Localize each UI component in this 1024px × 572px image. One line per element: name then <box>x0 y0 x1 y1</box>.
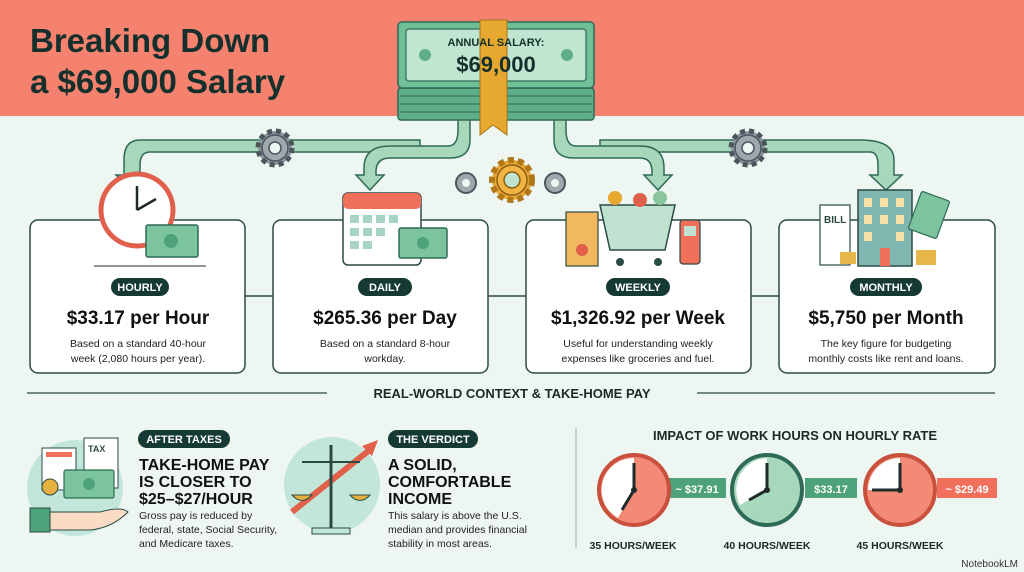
clock: 45 hours: 45 HOURS/WEEK <box>857 540 944 552</box>
clock: 40 hours: 40 HOURS/WEEK <box>724 540 811 552</box>
icon: building and bill: BILL <box>824 215 846 226</box>
card: daily: workday. <box>363 353 406 365</box>
panel: after taxes: AFTER TAXES <box>146 434 222 446</box>
card: monthly <box>779 190 995 373</box>
panel: impact of work hours <box>590 428 997 552</box>
clock: 35 hours: ~ $37.91 <box>675 484 719 496</box>
watermark: NotebookLM <box>961 559 1018 570</box>
panel: after taxes <box>27 430 277 550</box>
section heading: REAL-WORLD CONTEXT & TAKE-HOME PAY <box>373 386 651 401</box>
icon: calendar <box>343 193 447 265</box>
badge: after taxes <box>138 430 230 448</box>
panel: the verdict: median and provides financial <box>388 524 527 536</box>
gears <box>258 131 765 200</box>
panel: after taxes: IS CLOSER TO <box>139 474 252 491</box>
clock: 45 hours: ~ $29.49 <box>945 484 989 496</box>
title: Breaking Down <box>30 22 270 59</box>
panel: the verdict <box>284 430 527 550</box>
card: weekly: WEEKLY <box>615 282 662 294</box>
card: weekly <box>526 191 751 373</box>
card: hourly: HOURLY <box>117 282 163 294</box>
panel: impact of work hours: IMPACT OF WORK HOURS ON HOURLY RATE <box>653 428 937 443</box>
badge: monthly <box>850 278 922 296</box>
clock: 40 hours: $33.17 <box>814 484 848 496</box>
card: hourly: Based on a standard 40-hour <box>70 338 207 350</box>
panel: after taxes: $25–$27/HOUR <box>139 491 253 508</box>
panel: after taxes: and Medicare taxes. <box>139 538 234 550</box>
money flow arrows <box>116 118 902 190</box>
panel: the verdict: stability in most areas. <box>388 538 492 550</box>
panel: the verdict: A SOLID, <box>388 457 457 474</box>
clock: 35 hours <box>590 455 726 552</box>
icon: scale with arrow <box>284 437 380 534</box>
card: daily: Based on a standard 8-hour <box>320 338 451 350</box>
card: monthly: MONTHLY <box>859 282 913 294</box>
panel: the verdict: COMFORTABLE <box>388 474 512 491</box>
clock: 40 hours <box>724 455 857 552</box>
card: monthly: The key figure for budgeting <box>821 338 952 350</box>
card: daily: DAILY <box>369 282 402 294</box>
card: hourly: $33.17 per Hour <box>67 308 210 329</box>
header band <box>0 0 1024 116</box>
card: weekly: expenses like groceries and fuel. <box>562 353 714 365</box>
card: weekly: $1,326.92 per Week <box>551 308 725 329</box>
panel: after taxes: federal, state, Social Security, <box>139 524 277 536</box>
card: monthly: $5,750 per Month <box>808 308 964 329</box>
card: hourly: week (2,080 hours per year). <box>70 353 205 365</box>
panel: the verdict: INCOME <box>388 491 452 508</box>
icon: clock with cash <box>94 174 206 266</box>
clock: 45 hours <box>857 455 997 552</box>
connector line <box>30 295 995 297</box>
icon: tax and hand <box>27 438 128 536</box>
badge: daily <box>358 278 412 296</box>
icon: grocery cart <box>566 191 700 266</box>
panel: after taxes: TAKE-HOME PAY <box>139 457 270 474</box>
salary banknote: ANNUAL SALARY: <box>448 37 544 49</box>
badge: hourly <box>111 278 169 296</box>
badge: verdict <box>388 430 478 448</box>
panel: the verdict: This salary is above the U.S. <box>388 510 522 522</box>
salary banknote <box>398 20 594 135</box>
salary banknote: $69,000 <box>456 52 536 77</box>
title: a $69,000 Salary <box>30 63 286 100</box>
panel: the verdict: THE VERDICT <box>396 434 470 446</box>
clock: 35 hours: 35 HOURS/WEEK <box>590 540 677 552</box>
card: daily: $265.36 per Day <box>313 308 457 329</box>
card: monthly: monthly costs like rent and loans. <box>808 353 964 365</box>
card: hourly <box>30 174 245 373</box>
icon: tax and hand: TAX <box>88 444 105 454</box>
card: weekly: Useful for understanding weekly <box>563 338 713 350</box>
badge: weekly <box>606 278 670 296</box>
icon: building and bill <box>820 190 950 266</box>
title <box>30 22 286 100</box>
panel: after taxes: Gross pay is reduced by <box>139 510 253 522</box>
card: daily <box>273 193 488 373</box>
